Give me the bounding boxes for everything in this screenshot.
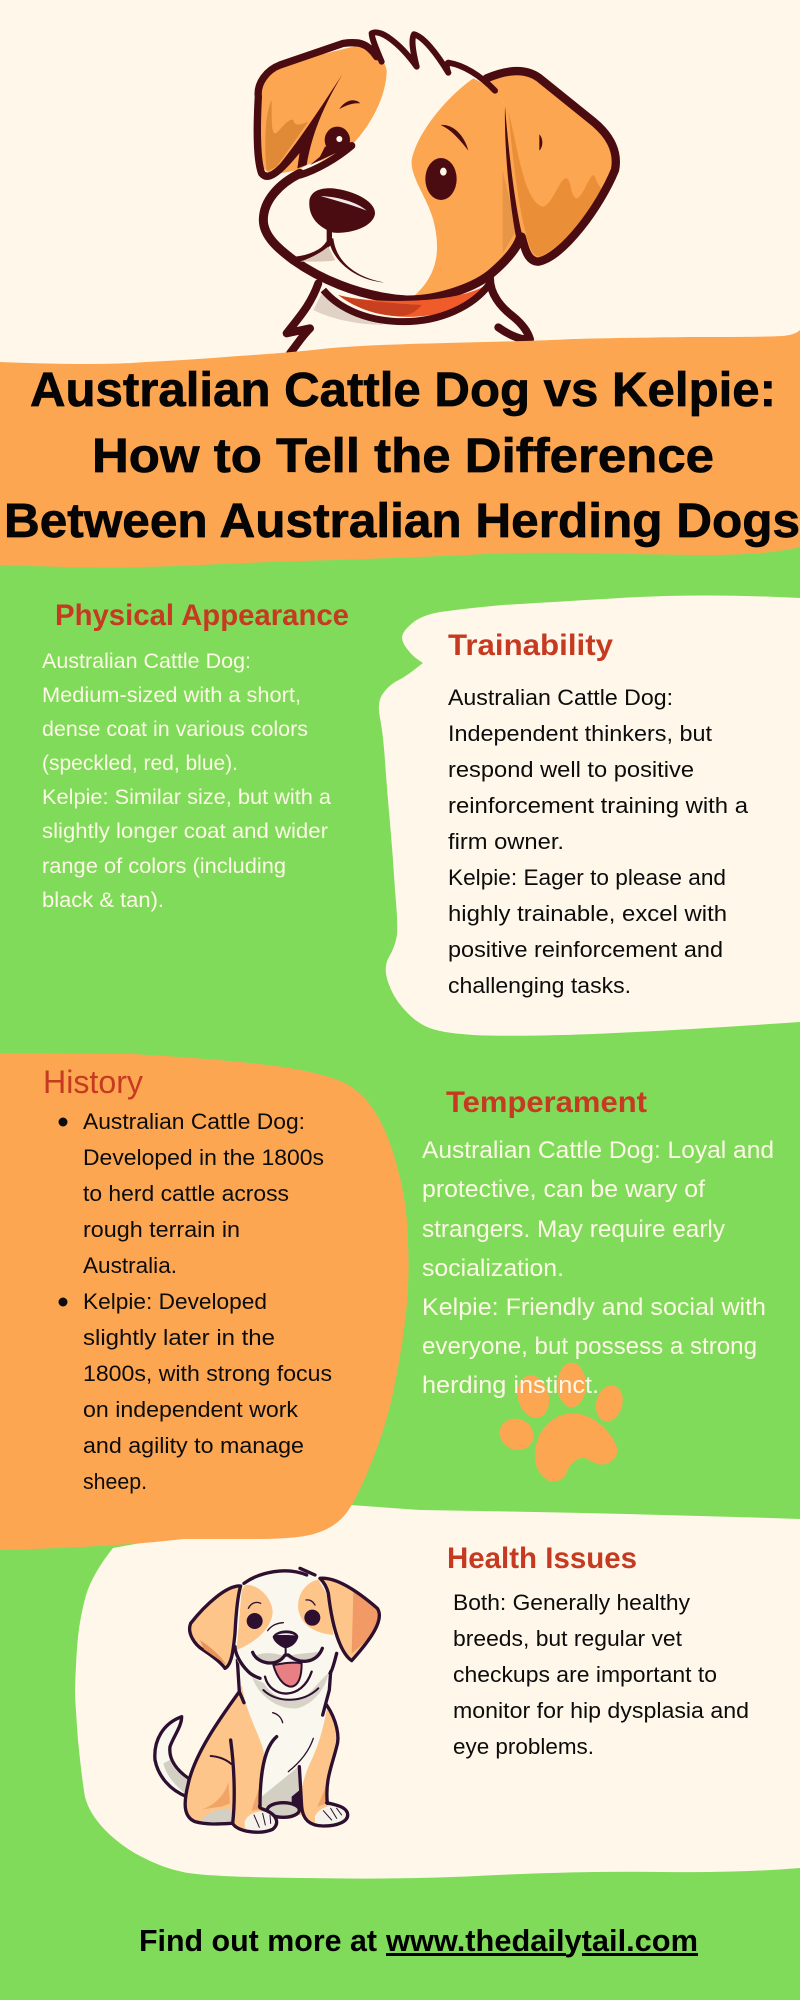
heading: trainability: Trainability: [448, 629, 613, 662]
text block: physical appearance: [42, 650, 331, 912]
text block: trainability: firm owner.: [448, 829, 564, 854]
footer call to action: www.thedailytail.com: [385, 1923, 698, 1958]
text block: physical appearance: Australian Cattle Dog:: [42, 650, 251, 673]
text block: health issues: [453, 1590, 749, 1759]
panel: health issues: [75, 1505, 800, 1879]
text block: temperament: socialization.: [422, 1255, 564, 1282]
text block: health issues: eye problems.: [453, 1734, 594, 1759]
illustration: sitting puppy: [155, 1568, 379, 1832]
text block: health issues: breeds, but regular vet: [453, 1626, 683, 1651]
footer call to action: [139, 1923, 698, 1958]
text block: history list: 1800s, with strong focus: [83, 1361, 332, 1386]
text block: temperament: protective, can be wary of: [422, 1176, 705, 1203]
text block: trainability: Kelpie: Eager to please and: [448, 865, 726, 890]
text block: history list: rough terrain in: [83, 1217, 240, 1242]
text block: history list: sheep.: [83, 1469, 147, 1494]
text block: physical appearance: (speckled, red, blue).: [42, 752, 238, 775]
text block: temperament: [422, 1137, 774, 1399]
text block: physical appearance: Kelpie: Similar size, but with a: [42, 786, 331, 809]
title: Australian Cattle Dog vs Kelpie:: [30, 364, 776, 417]
title: Between Australian Herding Dogs: [4, 495, 800, 548]
text block: history list: Developed in the 1800s: [83, 1145, 324, 1170]
text block: history list: [58, 1109, 332, 1494]
text block: temperament: strangers. May require early: [422, 1216, 725, 1243]
title: [4, 364, 800, 548]
text block: history list: on independent work: [83, 1397, 299, 1422]
text block: trainability: Independent thinkers, but: [448, 721, 713, 746]
panel: trainability: [379, 596, 800, 1036]
heading: physical appearance: Physical Appearance: [55, 599, 349, 632]
footer call to action: Find out more at: [139, 1923, 377, 1958]
panel: title band: [0, 330, 800, 567]
text block: trainability: positive reinforcement and: [448, 937, 723, 962]
heading: health issues: Health Issues: [447, 1542, 637, 1575]
text block: physical appearance: Medium-sized with a short,: [42, 684, 301, 707]
illustration: header dog head: [257, 32, 616, 353]
text block: physical appearance: slightly longer coat and wider: [42, 820, 328, 843]
text block: history list: slightly later in the: [83, 1325, 275, 1350]
text block: temperament: herding instinct.: [422, 1372, 599, 1399]
text block: history list: Kelpie: Developed: [83, 1289, 267, 1314]
panel: history: [0, 1053, 409, 1550]
icon: paw print: [494, 1363, 627, 1481]
title: How to Tell the Difference: [92, 430, 714, 483]
text block: trainability: [448, 685, 749, 998]
text block: history list: Australian Cattle Dog:: [83, 1109, 305, 1134]
text block: history list: and agility to manage: [83, 1433, 304, 1458]
text block: health issues: checkups are important to: [453, 1662, 717, 1687]
text block: physical appearance: dense coat in various colors: [42, 718, 308, 741]
text block: history list: Australia.: [83, 1253, 177, 1278]
text block: health issues: monitor for hip dysplasia and: [453, 1698, 749, 1723]
text block: temperament: everyone, but possess a strong: [422, 1333, 757, 1360]
text block: physical appearance: range of colors (including: [42, 855, 286, 878]
text block: trainability: Australian Cattle Dog:: [448, 685, 673, 710]
text block: health issues: Both: Generally healthy: [453, 1590, 691, 1615]
text block: temperament: Kelpie: Friendly and social with: [422, 1294, 766, 1321]
text block: trainability: highly trainable, excel with: [448, 901, 727, 926]
text block: physical appearance: black & tan).: [42, 889, 164, 912]
text block: history list: to herd cattle across: [83, 1181, 289, 1206]
text block: temperament: Australian Cattle Dog: Loyal and: [422, 1137, 774, 1164]
text block: trainability: respond well to positive: [448, 757, 694, 782]
text block: trainability: reinforcement training with a: [448, 793, 749, 818]
heading: history: History: [43, 1064, 143, 1100]
text block: trainability: challenging tasks.: [448, 973, 631, 998]
heading: temperament: Temperament: [446, 1086, 647, 1119]
